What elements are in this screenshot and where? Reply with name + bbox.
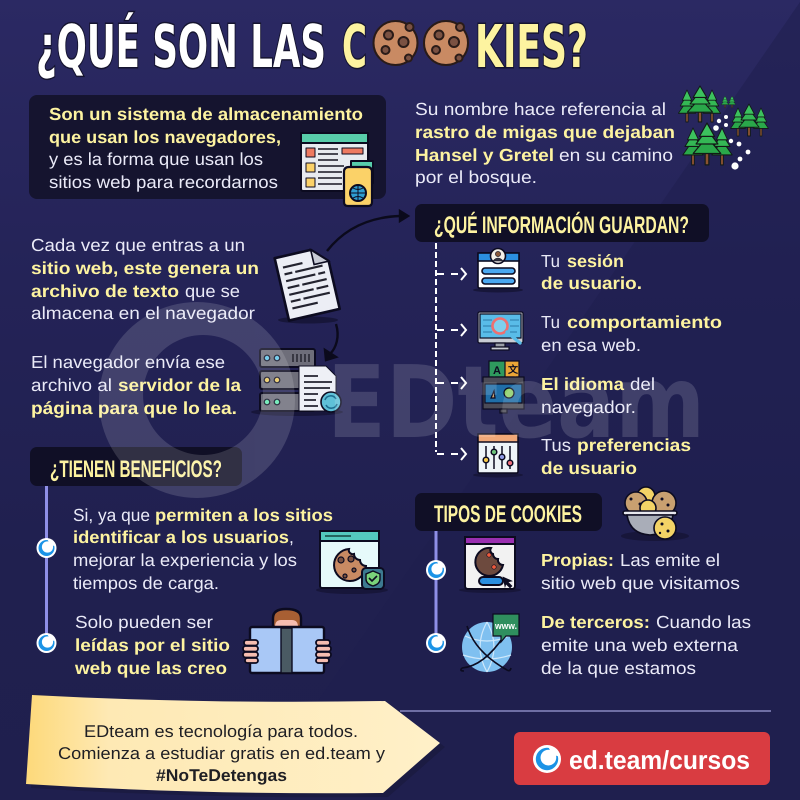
panel: definition: Son un sistema de almacenamiento: [49, 104, 363, 124]
panel: definition: que usan los navegadores,: [49, 127, 281, 147]
panel: definition: [29, 95, 386, 199]
text: name origin: en su camino: [559, 145, 673, 165]
text: idioma: del: [630, 374, 655, 394]
text: name origin: [415, 99, 675, 187]
heading: tienen beneficios: [30, 447, 242, 486]
heading: que informacion guardan: [415, 204, 709, 242]
banner: call to action: #NoTeDetengas: [156, 766, 287, 785]
banner: call to action: EDteam es tecnología para todos.: [84, 722, 358, 741]
banner: call to action: [26, 695, 445, 797]
text: benefit only site: Solo pueden ser: [75, 612, 213, 632]
text: benefit only site: [74, 612, 230, 678]
text: propias: Las emite el: [620, 550, 720, 570]
text: file generation: almacena en el navegador: [31, 303, 255, 323]
button: ed.team/cursos: ed.team/cursos: [569, 745, 750, 775]
text: benefit identify users: ,: [289, 527, 294, 547]
text: browser sends file: archivo al: [31, 375, 112, 395]
icon: third party globe: [461, 614, 519, 672]
text: file generation: Cada vez que entras a un: [31, 235, 245, 255]
text: propias: sitio web que visitamos: [541, 573, 740, 593]
text: name origin: por el bosque.: [415, 167, 537, 187]
text: sesion de usuario: sesión: [567, 251, 624, 271]
text: idioma: navegador.: [541, 397, 636, 417]
icon: monitor with magnifier: [478, 312, 523, 350]
text: de terceros: Cuando las: [656, 612, 751, 632]
text: file generation: archivo de texto: [31, 281, 179, 301]
text: preferencias: preferencias: [577, 435, 691, 455]
text: comportamiento: Tu: [541, 312, 560, 332]
icon: sliders window: [473, 434, 523, 478]
icon: forest and crumbs: [678, 86, 768, 170]
text: preferencias: Tus: [541, 435, 571, 455]
timeline: beneficios: [36, 486, 56, 653]
title: C: [342, 12, 367, 81]
text: benefit identify users: identificar a los usuarios: [73, 527, 289, 547]
icon: EDteam logo: [533, 745, 561, 773]
icon: language translation screen: A: [493, 365, 501, 377]
marker: propias: [426, 560, 446, 580]
list connector: dashed tree: [436, 243, 466, 460]
text: name origin: rastro de migas que dejaban: [415, 122, 675, 142]
title: ¿QUÉ SON LAS: [36, 12, 326, 81]
text: benefit identify users: [73, 505, 333, 593]
text: benefit only site: web que las creo: [74, 658, 227, 678]
text: benefit identify users: tiempos de carga.: [73, 573, 219, 593]
watermark: EDteam logo: EDteam: [327, 344, 705, 461]
text: benefit identify users: permiten a los sitios: [155, 505, 333, 525]
icon: third party globe: www.: [494, 621, 517, 632]
title: KIES?: [475, 12, 588, 81]
heading: tienen beneficios: ¿TIENEN BENEFICIOS?: [50, 456, 222, 483]
icon: person reading: [243, 609, 331, 673]
marker: first benefit: [36, 538, 56, 558]
panel: definition: sitios web para recordarnos: [49, 172, 278, 192]
text: sesion de usuario: Tu: [541, 251, 560, 271]
text: preferencias: de usuario: [541, 458, 637, 478]
icon: user login card: [473, 248, 523, 292]
text: idioma: El idioma: [541, 374, 624, 394]
text: browser sends file: página para que lo lea.: [31, 398, 237, 418]
watermark: EDteam logo: [99, 302, 705, 498]
text: name origin: Hansel y Gretel: [415, 145, 554, 165]
text: sesion de usuario: [541, 251, 642, 293]
text: name origin: Su nombre hace referencia al: [415, 99, 666, 119]
arrow: to preferencias: [437, 448, 466, 460]
arrow: to sesion: [437, 268, 466, 280]
icon: cookie window with shield: [316, 531, 388, 594]
banner: call to action: Comienza a estudiar gratis en ed.team y: [58, 744, 386, 763]
icon: language translation screen: 文: [507, 364, 519, 376]
marker: second benefit: [36, 633, 56, 653]
timeline: tipos: [426, 531, 446, 653]
arrow: to idioma: [437, 377, 466, 389]
text: de terceros: emite una web externa: [541, 635, 738, 655]
text: file generation: [31, 235, 259, 323]
icon: first party cookie window: [459, 537, 521, 593]
arrow: document to storage heading: [327, 211, 408, 251]
text: propias: Propias:: [541, 550, 614, 570]
text: comportamiento: en esa web.: [541, 335, 641, 355]
icon: language translation screen: [483, 361, 524, 413]
arrow: document to server: [325, 324, 338, 360]
text: benefit identify users: Si, ya que: [73, 505, 150, 525]
icon: title cookie two: [424, 21, 468, 65]
icon: server with document: [251, 349, 343, 416]
button: ed.team/cursos: [514, 732, 770, 785]
text: browser sends file: servidor de la: [118, 375, 241, 395]
heading: tipos de cookies: [415, 493, 602, 531]
icon: text document: [275, 246, 340, 324]
text: de terceros: De terceros:: [541, 612, 650, 632]
text: idioma: [541, 374, 655, 417]
text: de terceros: de la que estamos: [541, 658, 696, 678]
icon: browser with folder: [301, 133, 373, 206]
text: browser sends file: El navegador envía ese: [31, 352, 225, 372]
icon: bowl of cookies: [621, 487, 689, 541]
marker: de terceros: [426, 633, 446, 653]
text: file generation: que se: [185, 281, 240, 301]
text: preferencias: [541, 435, 691, 478]
icon: title cookie one: [374, 21, 418, 65]
heading: tipos de cookies: TIPOS DE COOKIES: [434, 501, 582, 528]
text: file generation: sitio web, este genera un: [31, 258, 259, 278]
text: comportamiento: [541, 312, 722, 355]
text: comportamiento: comportamiento: [567, 312, 722, 332]
text: benefit identify users: mejorar la experiencia y los: [73, 550, 297, 570]
arrow: to comportamiento: [437, 324, 466, 336]
text: sesion de usuario: de usuario.: [541, 273, 642, 293]
text: browser sends file: [31, 352, 241, 418]
text: benefit only site: leídas por el sitio: [75, 635, 230, 655]
panel: definition: y es la forma que usan los: [49, 149, 263, 169]
text: propias: [541, 550, 740, 593]
text: de terceros: [541, 612, 751, 678]
